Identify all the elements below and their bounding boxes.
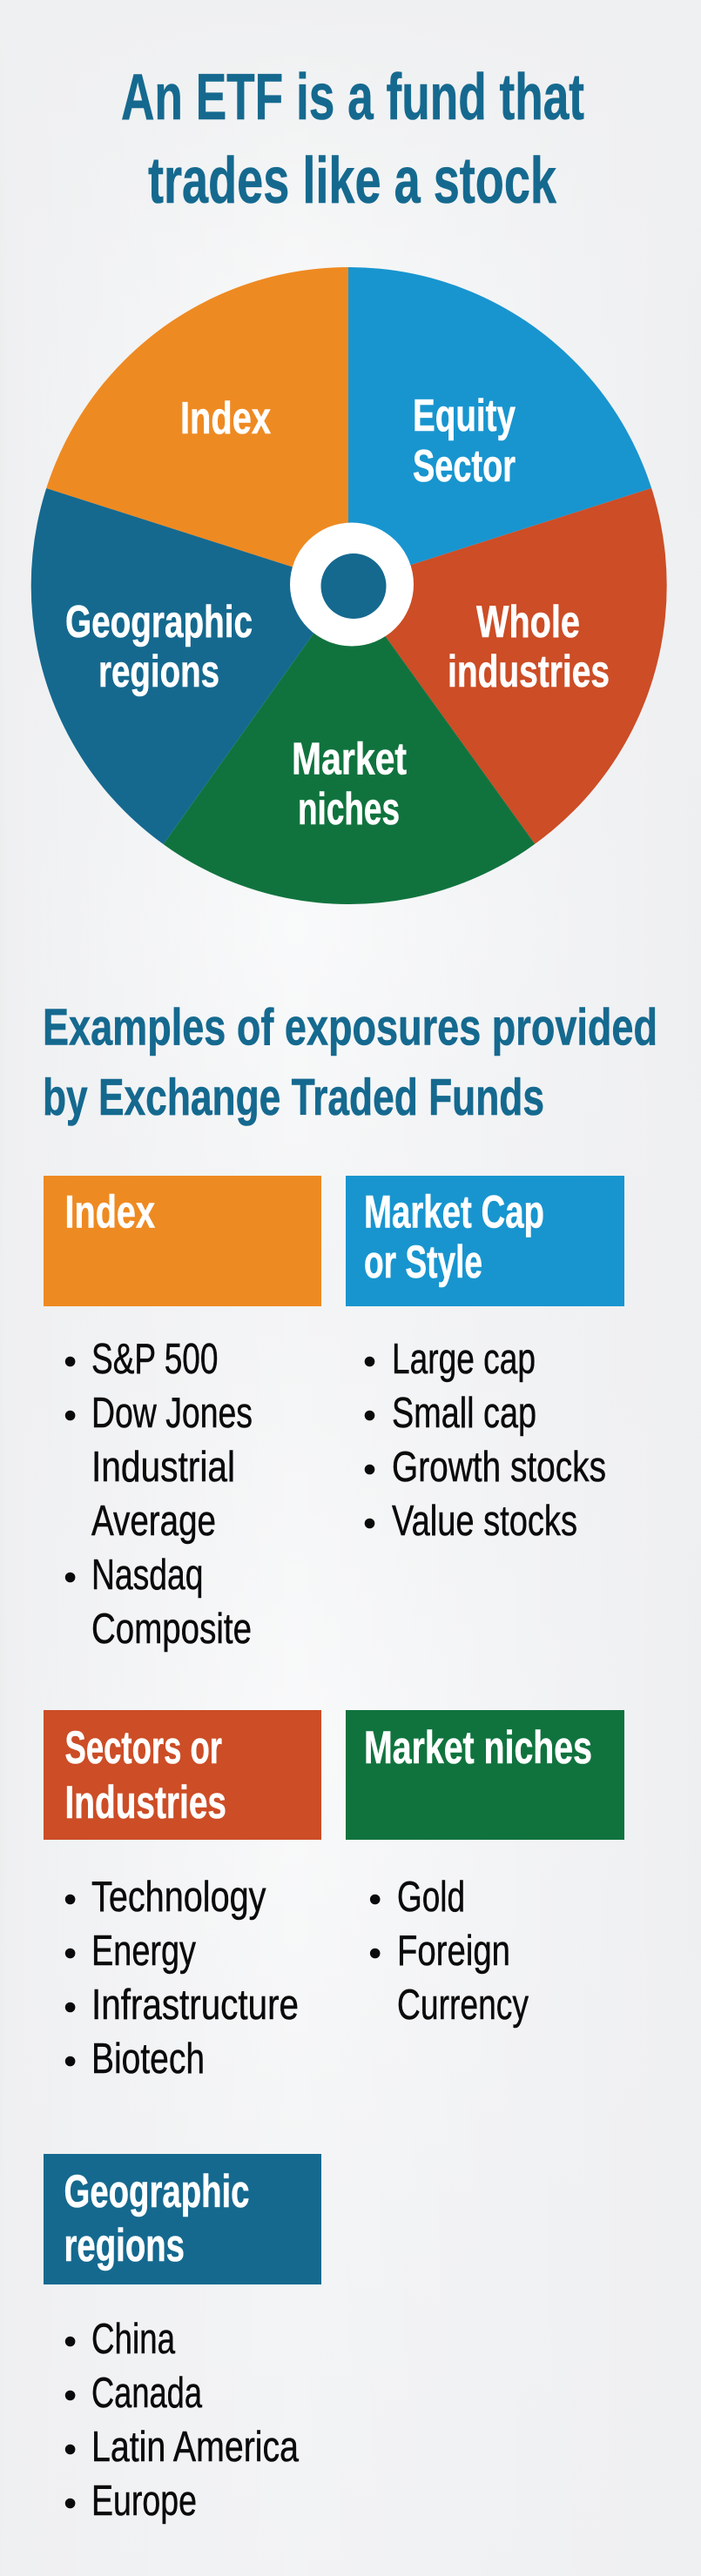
header text: Market niches: Market niches [364,1722,592,1774]
bullet list: Market Cap or Style: Growth stocks [392,1444,606,1491]
bullet list: Market niches: Foreign [397,1928,510,1975]
header box: Market niches [346,1710,624,1840]
pie labels: Equity [413,391,516,441]
bullet list: Market Cap or Style: Small cap [392,1390,536,1437]
bullet list: Geographic regions: Latin America [91,2424,300,2471]
slice: Whole industries [385,487,667,844]
pie labels: regions [98,647,219,697]
pie labels: Index [180,393,271,444]
title [121,60,584,217]
bullet list: Geographic regions: Europe [91,2478,197,2525]
bullet list: Market Cap or Style: Large cap [392,1336,536,1383]
panel: Market niches [346,1710,624,2029]
header text: Sectors or Industries: Industries [64,1777,226,1828]
panel: Sectors or Industries [44,1710,321,2083]
pie chart: ETF categories [31,267,667,904]
bullet list: Geographic regions [65,2316,300,2525]
header box: Index [44,1176,321,1306]
panel: Index [44,1176,321,1653]
header text: Sectors or Industries [64,1722,226,1828]
header text: Market Cap or Style: Market Cap [364,1187,544,1238]
center ring [290,522,414,646]
bullet list: Sectors or Industries: Infrastructure [91,1982,299,2029]
bullet list: Index: S&P 500 [91,1336,218,1383]
header text: Geographic regions: Geographic [64,2166,249,2217]
bullet list: Sectors or Industries: Technology [91,1874,266,1921]
header box: Sectors or Industries [44,1710,321,1840]
header text: Sectors or Industries: Sectors or [64,1722,222,1774]
bullet list: Market niches: Currency [397,1982,529,2029]
header text: Geographic regions [64,2166,249,2271]
bullet list: Index: Nasdaq [91,1552,204,1599]
bullet list: Market Cap or Style [365,1336,606,1545]
bullet list: Index: Industrial [91,1444,235,1491]
bullet list: Geographic regions: Canada [91,2370,203,2417]
title: trades like a stock [148,144,556,217]
bullet list: Sectors or Industries: Energy [91,1928,196,1975]
bullet list: Market Cap or Style: Value stocks [392,1498,577,1545]
slice: Index [46,267,348,567]
bullet list: Index: Dow Jones [91,1390,253,1437]
header text: Geographic regions: regions [64,2220,185,2271]
section heading: by Exchange Traded Funds [43,1069,544,1126]
bullet list: Market niches: Gold [397,1874,465,1921]
bullet list: Index: Average [91,1498,216,1545]
header text: Market Cap or Style [364,1187,544,1288]
slice: Geographic regions [31,488,313,844]
slice: Equity Sector [348,267,651,566]
panel: Market Cap or Style [346,1176,624,1545]
center dot [320,553,387,619]
pie labels: Geographic [65,597,253,647]
bullet list: Market niches [370,1874,529,2029]
header text: Market Cap or Style: or Style [364,1237,482,1288]
section heading [43,999,657,1126]
panel: Geographic regions [44,2154,321,2525]
header box: Geographic regions [44,2154,321,2284]
pie labels: Whole [476,597,580,647]
bullet list: Index: Composite [91,1606,252,1653]
bullet list: Geographic regions: China [91,2316,176,2363]
pie labels: industries [448,647,610,697]
header text: Index: Index [64,1187,155,1238]
header box: Market Cap or Style [346,1176,624,1306]
pie labels: Market [292,735,407,785]
pie labels: Sector [413,441,516,492]
bullet list: Index [65,1336,253,1653]
bullet list: Sectors or Industries: Biotech [91,2036,205,2083]
pie labels [65,391,610,835]
slice: Market niches [164,634,535,904]
pie labels: niches [298,784,400,835]
bullet list: Sectors or Industries [65,1874,299,2083]
